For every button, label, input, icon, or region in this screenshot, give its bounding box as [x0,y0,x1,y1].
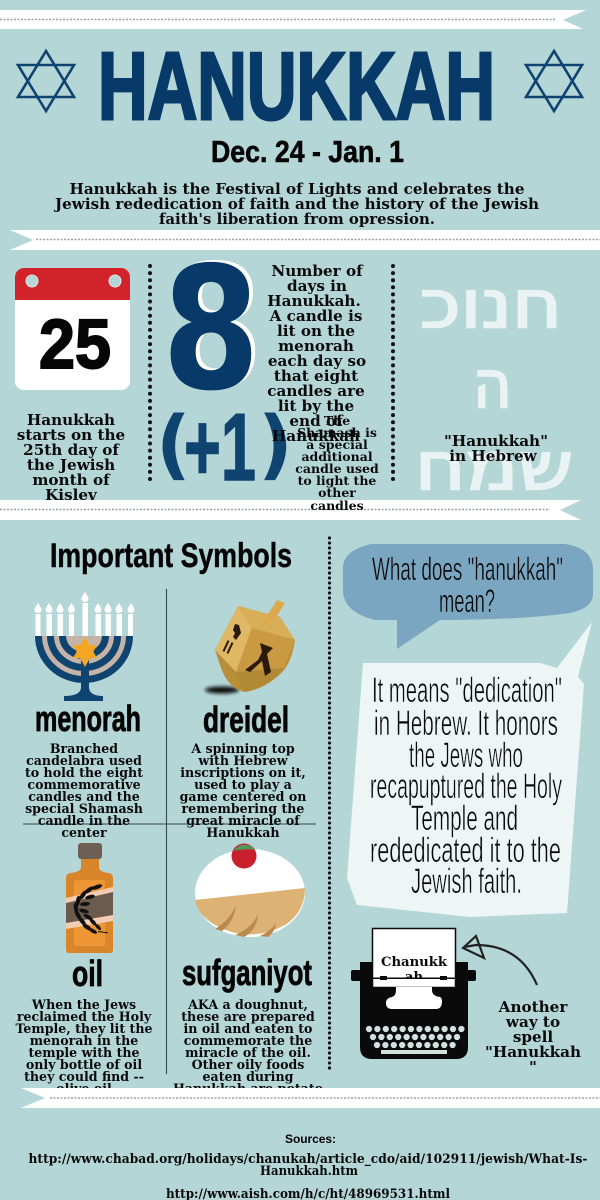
oil description: only bottle of oil [26,1057,142,1072]
eight days text: Hanukkah. [267,292,361,310]
sources: http://www.chabad.org/holidays/chanukah/article_cdo/aid/102911/jewish/What-Is- [28,1151,588,1167]
hebrew word: ה [473,346,512,423]
eight days text: that eight [274,367,358,385]
icon: dreidel [205,600,295,694]
icon: right star of David [526,51,582,111]
eight days text: lit on the [277,322,355,340]
top ribbon banner [0,10,586,29]
typewriter paper text: ah [405,970,423,985]
hebrew caption [444,432,548,465]
icon: menorah [34,592,134,701]
hebrew word: חמש [415,428,573,505]
divider dots left [148,266,152,486]
typewriter caption: spell [513,1028,553,1046]
shamash text: The [324,413,350,428]
dreidel description: remembering the [182,801,304,816]
oil description: olive oil [56,1081,112,1096]
icon: sufganiyah doughnut [195,844,305,937]
sufganiyot description: in oil and eaten to [184,1021,312,1036]
oil description [15,997,153,1096]
label: menorah: menorah [35,698,141,739]
eight days text: candles are [267,382,365,400]
sufganiyot description: these are prepared [181,1009,315,1024]
intro text: Jewish rededication of faith and the history of the Jewish [53,195,539,213]
dreidel description [180,741,306,840]
calendar caption: month of [32,471,111,489]
oil description: reclaimed the Holy [17,1009,152,1024]
label: dreidel: dreidel [203,699,289,740]
typewriter caption: way to [505,1013,560,1031]
hebrew word [415,266,573,505]
intro text [53,180,539,228]
date heading: Dec. 24 - Jan. 1 [211,134,404,169]
menorah description: commemorative [27,777,141,792]
calendar caption: Kislev [45,486,98,504]
icon: calendar showing 25: 25 [39,305,111,383]
divider dots right [391,266,395,486]
big number (+1): ) [258,399,293,488]
sufganiyot description [173,997,323,1096]
typewriter caption [485,998,581,1076]
eight days text: Number of [271,262,364,280]
shamash text [295,413,379,513]
menorah description: to hold the eight [25,765,143,780]
shamash text: candle used [295,461,379,476]
calendar caption: Hanukkah [27,411,115,429]
shamash text: additional [301,449,373,464]
oil description: temple with the [28,1045,140,1060]
menorah description: center [61,825,107,840]
eight days text: each day so [268,352,366,370]
icon: left star of David [18,51,74,111]
speech bubble: answer: Jewish faith. [411,862,522,901]
eight days text [267,262,366,445]
oil description: menorah in the [30,1033,138,1048]
big number 8: 8 [162,231,260,429]
sufganiyot description: commemorate the [184,1033,312,1048]
typewriter caption: "Hanukkah [485,1043,581,1061]
sufganiyot description: miracle of the oil. [185,1045,311,1060]
dreidel description: Hanukkah [206,825,280,840]
sufganiyot description: AKA a doughnut, [187,997,308,1012]
calendar caption: starts on the [17,426,125,444]
shamash text: Shamash is [297,425,377,440]
oil description: When the Jews [31,997,136,1012]
dreidel description: used to play a [194,777,292,792]
label: oil: oil [72,953,103,994]
hebrew caption: in Hebrew [449,447,538,465]
eight days text: menorah [278,337,354,355]
symbols grid lines [23,589,316,1074]
label: sufganiyot: sufganiyot [182,952,312,993]
dreidel description: inscriptions on it, [180,765,306,780]
menorah description: Branched [50,741,118,756]
speech bubble: question [343,544,593,649]
hebrew caption: "Hanukkah" [444,432,548,450]
sources: Hanukkah.htm [260,1163,359,1178]
icon: oil bottle [66,843,113,953]
menorah description: candles and the [28,789,140,804]
sufganiyot description: Hanukkah are potato [173,1081,323,1096]
eight days text: lit by the [278,397,354,415]
heading: important symbols: Important Symbols [50,537,292,575]
ribbon banner 4 [21,1088,600,1108]
sufganiyot description: Other oily foods [192,1057,304,1072]
shamash text: other [318,485,356,500]
shamash text: a special [306,437,368,452]
hebrew word: כונח [420,266,562,343]
menorah description [25,741,143,840]
dreidel description: game centered on [180,789,306,804]
typewriter caption: Another [498,998,568,1016]
dreidel description: great miracle of [186,813,301,828]
calendar caption [17,411,125,504]
big number (+1): ( [156,399,191,488]
typewriter caption: " [529,1058,537,1076]
typewriter paper text: Chanukk [381,955,448,970]
ribbon banner 2 [10,230,600,250]
sources [28,1132,588,1200]
icon: calendar showing 25 [15,268,130,390]
shamash text: to light the [298,473,376,488]
dreidel description: with Hebrew [197,753,289,768]
dreidel description: A spinning top [190,741,295,756]
speech bubble: question: mean? [439,583,495,619]
speech bubble: answer [347,622,592,917]
shamash text: candles [310,498,364,513]
eight days text: end of [289,412,344,430]
oil description: Temple, they lit the [15,1021,153,1036]
sufganiyot description: eaten during [203,1069,294,1084]
menorah description: candle in the [38,813,130,828]
calendar caption: the Jewish [27,456,115,474]
intro text: Hanukkah is the Festival of Lights and celebrates the [70,180,524,198]
icon: typewriter [351,928,476,1059]
eight days text: days in [287,277,347,295]
eight days text: A candle is [269,307,362,325]
oil description: they could find -- [24,1069,144,1084]
divider dots column [328,538,331,1070]
speech bubble: answer: Temple and [411,799,518,838]
intro text: faith's liberation from opression. [159,210,435,228]
big number 8: 8 [166,229,264,427]
eight days text: Hanukkah [272,427,360,445]
menorah description: candelabra used [26,753,142,768]
calendar caption: 25th day of [23,441,120,459]
typewriter paper text [382,956,448,978]
sources: Sources: [285,1132,336,1146]
big number (+1): +1 [184,394,256,501]
ribbon banner 3 [0,500,581,520]
menorah description: special Shamash [25,801,143,816]
arrow: to typewriter [463,936,537,985]
